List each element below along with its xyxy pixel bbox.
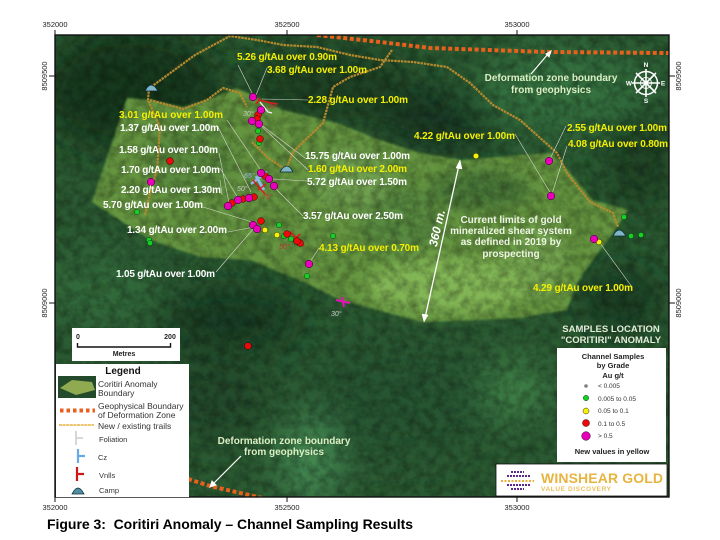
heading: samples location: SAMPLES LOCATION (562, 324, 660, 335)
callout: top deformation zone: Deformation zone boundary (485, 73, 618, 84)
legend title: Legend (105, 366, 141, 377)
grade labels: 5.70 g/tAu over 1.00m (103, 200, 203, 211)
grade labels: 4.29 g/tAu over 1.00m (533, 283, 633, 294)
panel: legend (56, 364, 189, 497)
panel: channel samples legend: > 0.5 (598, 433, 613, 440)
grade labels: 1.05 g/tAu over 1.00m (116, 269, 215, 280)
heading: samples location: "CORITIRI" ANOMALY (561, 335, 662, 346)
callout: current limits: prospecting (482, 249, 540, 260)
channel sample points (134, 93, 644, 349)
axis labels and ticks: 8509500 (40, 61, 49, 91)
legend item: Vnlls: Vnlls (99, 471, 116, 480)
panel: channel samples legend: 0.1 to 0.5 (598, 421, 625, 428)
map frame (55, 35, 669, 497)
axis labels and ticks: 352500 (274, 503, 300, 512)
grade labels: 1.60 g/tAu over 2.00m (308, 164, 407, 175)
icon: compass rose: W (626, 80, 633, 88)
callout: current limits: Current limits of gold (460, 215, 562, 226)
legend item: anomaly boundary: Boundary (98, 388, 135, 398)
legend item: anomaly boundary (58, 376, 158, 398)
logo: Winshear Gold: WINSHEAR GOLD (541, 470, 663, 486)
icon: compass rose: S (644, 98, 649, 105)
callout: current limits: mineralized shear system (450, 226, 572, 237)
axis labels and ticks: 352000 (42, 503, 68, 512)
legend item: geophysical boundary: of Deformation Zone (98, 410, 176, 420)
scale bar: 0 (76, 334, 80, 341)
grade labels: 5.26 g/tAu over 0.90m (237, 52, 337, 63)
panel: channel samples legend: 0.05 to 0.1 (598, 408, 629, 415)
structural symbols: 65° (244, 172, 255, 180)
panel: channel samples legend: 0.005 to 0.05 (598, 396, 636, 403)
panel: channel samples legend: Au g/t (602, 371, 624, 380)
scale bar: 200 (164, 334, 176, 341)
panel: channel samples legend: by Grade (597, 361, 629, 370)
legend item: anomaly boundary: Coritiri Anomaly (98, 379, 158, 389)
grade labels: 2.28 g/tAu over 1.00m (308, 95, 408, 106)
legend item: geophysical boundary (60, 401, 184, 420)
logo: Winshear Gold (496, 464, 667, 496)
panel: channel samples legend: Channel Samples (582, 352, 644, 361)
legend item: Cz: Cz (98, 453, 107, 462)
grade labels: 4.22 g/tAu over 1.00m (414, 131, 515, 142)
legend item: camp: Camp (99, 486, 119, 495)
panel: Coritiri anomaly boundary (92, 88, 628, 322)
structural symbols (237, 98, 350, 318)
axis labels and ticks: 352500 (274, 20, 300, 29)
axis labels and ticks: 353000 (504, 20, 530, 29)
structural symbols: 30° (243, 110, 254, 118)
grade labels: 4.08 g/tAu over 0.80m (568, 139, 668, 150)
grade labels: 3.57 g/tAu over 2.50m (303, 211, 403, 222)
callout: top deformation zone: from geophysics (511, 85, 591, 96)
axis labels and ticks: 352000 (42, 20, 68, 29)
callout: top deformation zone (485, 51, 618, 96)
axis labels and ticks: 8509000 (674, 288, 683, 318)
satellite map (40, 30, 670, 505)
panel: channel samples legend: < 0.005 (598, 383, 620, 390)
structural symbols: 75° (262, 193, 273, 201)
grade labels: 1.34 g/tAu over 2.00m (127, 225, 227, 236)
figure caption: Figure 3: Coritiri Anomaly – Channel Sampling Results (47, 516, 413, 532)
grade labels: 1.37 g/tAu over 1.00m (120, 123, 219, 134)
logo: Winshear Gold: VALUE DISCOVERY (541, 486, 612, 493)
grade labels: 1.58 g/tAu over 1.00m (119, 145, 218, 156)
leader lines (203, 65, 632, 287)
legend item: trails: New / existing trails (98, 421, 171, 431)
scale bar (72, 328, 180, 361)
callout: current limits (450, 215, 572, 260)
axis labels and ticks: 8509000 (40, 288, 49, 318)
panel: channel samples legend (557, 348, 666, 462)
structural symbols: 50° (279, 243, 290, 251)
grade labels: 15.75 g/tAu over 1.00m (305, 151, 410, 162)
heading: samples location (561, 324, 662, 346)
icon: compass rose: N (644, 62, 649, 69)
scale bar: Metres (113, 351, 135, 358)
icon: compass rose: E (661, 80, 666, 88)
legend item: foliation: Foliation (99, 435, 127, 444)
legend item: geophysical boundary: Geophysical Boundary (98, 401, 184, 411)
deformation zone boundary: bottom (188, 479, 262, 498)
trails (145, 36, 618, 227)
camp icons (145, 85, 626, 236)
axis labels and ticks: 353000 (504, 503, 530, 512)
grade labels: 5.72 g/tAu over 1.50m (307, 177, 407, 188)
grade labels: 2.55 g/tAu over 1.00m (567, 123, 667, 134)
callout: bottom deformation zone: from geophysics (244, 447, 324, 458)
panel: channel samples legend: New values in yellow (575, 447, 649, 456)
grade labels: 1.70 g/tAu over 1.00m (121, 165, 220, 176)
grade labels: 2.20 g/tAu over 1.30m (121, 185, 221, 196)
structural symbols: 30° (268, 102, 279, 110)
grade labels: 3.01 g/tAu over 1.00m (119, 110, 223, 121)
callout: current limits: as defined in 2019 by (461, 237, 562, 248)
arrow: 360 m width: 360 m. (426, 208, 448, 248)
axis labels and ticks: 8509500 (674, 61, 683, 91)
grade labels: 3.68 g/tAu over 1.00m (267, 65, 367, 76)
deformation zone boundary: top (317, 35, 669, 53)
callout: bottom deformation zone (210, 436, 351, 487)
structural symbols: 30° (331, 310, 342, 318)
grade labels: 4.13 g/tAu over 0.70m (319, 243, 419, 254)
grade labels (103, 52, 668, 294)
icon: compass rose (626, 62, 666, 105)
callout: bottom deformation zone: Deformation zone boundary (218, 436, 351, 447)
structural symbols: 50° (237, 185, 248, 193)
icon: logo dots (501, 472, 534, 489)
arrow: 360 m width (422, 160, 462, 322)
